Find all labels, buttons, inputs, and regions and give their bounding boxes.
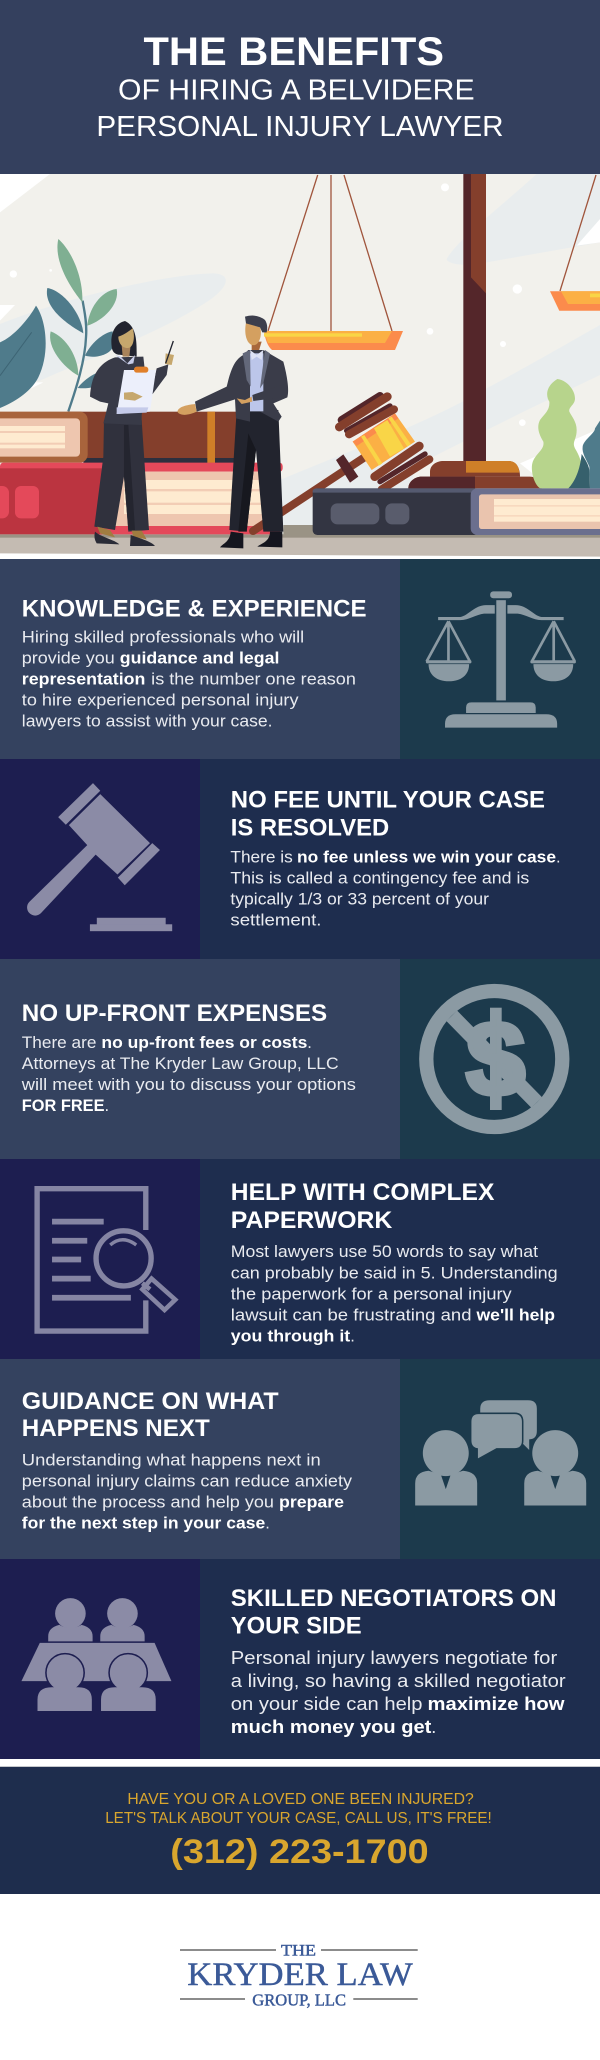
illustration: lawyers with scales and gavel [0, 174, 600, 560]
text block [21, 1034, 356, 1115]
woman with clipboard [90, 321, 174, 546]
text block: to hire experienced personal injury [22, 691, 299, 709]
scale post [463, 174, 486, 462]
logo: the kryder law group [180, 1941, 418, 2010]
heading: HAPPENS NEXT [22, 1415, 210, 1442]
logo: the kryder law group: KRYDER LAW [187, 1957, 414, 1993]
text block: about the process and help you [22, 1494, 274, 1512]
panel: no up-front expenses [0, 959, 600, 1159]
text block: on your side can help [231, 1694, 422, 1714]
text block: representation [22, 670, 145, 688]
text block: There are [22, 1034, 96, 1052]
right books [313, 488, 600, 535]
heading [22, 1388, 279, 1442]
icon: gavel [27, 783, 172, 931]
heading: NO FEE UNTIL YOUR CASE [231, 787, 545, 814]
text block: settlement. [230, 912, 322, 930]
text block [230, 848, 561, 930]
text block: FOR FREE [22, 1097, 104, 1115]
icon: people talking [415, 1400, 586, 1506]
text block: Hiring skilled professionals who will [22, 628, 304, 646]
call to action text [105, 1791, 492, 1827]
heading: GUIDANCE ON WHAT [22, 1388, 279, 1415]
heading: NO UP-FRONT EXPENSES [22, 1000, 327, 1027]
text block: maximize how [428, 1694, 566, 1714]
logo: the kryder law group: GROUP, LLC [252, 1991, 346, 2010]
title: THE BENEFITS [144, 30, 444, 74]
text block: Personal injury lawyers negotiate for [231, 1648, 557, 1668]
heading: KNOWLEDGE & EXPERIENCE [22, 595, 367, 622]
plant [47, 239, 117, 411]
heading [231, 1179, 495, 1234]
gavel [253, 396, 429, 531]
panel: no fee until resolved [0, 759, 600, 959]
text block: typically 1/3 or 33 percent of your [230, 890, 490, 908]
text block: personal injury claims can reduce anxiety [22, 1472, 353, 1490]
phone number: (312) 223-1700 [170, 1833, 429, 1871]
text block: Understanding what happens next in [22, 1451, 321, 1469]
title [96, 30, 504, 143]
big leaf [0, 306, 46, 408]
text block [22, 1451, 353, 1532]
text block: the paperwork for a personal injury [231, 1285, 513, 1303]
logo: the kryder law group: THE [281, 1941, 316, 1960]
heading: SKILLED NEGOTIATORS ON [231, 1585, 557, 1612]
text block: much money you get [231, 1717, 431, 1737]
title: PERSONAL INJURY LAWYER [96, 111, 504, 143]
heading [231, 787, 545, 842]
floor [0, 525, 600, 559]
icon: document with magnifier [37, 1189, 175, 1331]
text block: . [556, 848, 561, 866]
panel: help with paperwork [0, 1159, 600, 1359]
text block: a living, so having a skilled negotiator [231, 1671, 566, 1691]
text block: This is called a contingency fee and is [230, 869, 529, 887]
man in suit [177, 316, 288, 548]
shrubs [532, 379, 600, 488]
text block [231, 1648, 566, 1737]
text block: Most lawyers use 50 words to say what [231, 1243, 538, 1261]
icon: meeting table [21, 1598, 171, 1711]
call to action banner [0, 1766, 600, 1894]
right scale pan [550, 175, 600, 311]
panel: skilled negotiators [0, 1559, 600, 1759]
icon: no money [426, 991, 562, 1127]
text block [231, 1243, 558, 1345]
text block: can probably be said in 5. Understanding [231, 1264, 558, 1282]
heading: YOUR SIDE [231, 1612, 362, 1639]
panel: guidance on what happens next [0, 1359, 600, 1559]
icon: no money: $ [466, 1000, 525, 1118]
text block: we'll help [475, 1306, 555, 1324]
heading: IS RESOLVED [231, 814, 389, 842]
icon: scales of justice [426, 591, 576, 728]
text block: is the number one reason [151, 670, 356, 688]
panel: knowledge and experience [0, 559, 600, 759]
text block: you through it [231, 1327, 351, 1345]
text block: lawyers to assist with your case. [22, 712, 272, 730]
heading: HELP WITH COMPLEX [231, 1179, 495, 1206]
text block: no fee unless we win your case [297, 848, 556, 866]
text block: provide you [22, 649, 115, 667]
call to action text: LET'S TALK ABOUT YOUR CASE, CALL US, IT'S FREE! [105, 1810, 492, 1827]
scale base [408, 461, 542, 488]
text block [22, 628, 356, 730]
text block: Attorneys at The Kryder Law Group, LLC [22, 1055, 339, 1073]
text block: prepare [279, 1494, 344, 1512]
call to action text: HAVE YOU OR A LOVED ONE BEEN INJURED? [127, 1791, 474, 1808]
left scale pan [264, 175, 403, 350]
text block: . [350, 1327, 355, 1345]
text block: will meet with you to discuss your options [21, 1076, 356, 1094]
text block: lawsuit can be frustrating and [231, 1306, 472, 1324]
text block: . [431, 1717, 436, 1737]
text block: . [265, 1514, 270, 1532]
heading [231, 1585, 557, 1639]
text block: for the next step in your case [22, 1514, 265, 1532]
stacked books [0, 412, 283, 534]
title: OF HIRING A BELVIDERE [118, 74, 475, 106]
text block: . [307, 1034, 312, 1052]
text block: no up-front fees or costs [101, 1034, 307, 1052]
heading: PAPERWORK [231, 1207, 393, 1234]
text block: . [104, 1097, 109, 1115]
text block: There is [230, 848, 293, 866]
text block: guidance and legal [120, 649, 279, 667]
header panel [0, 0, 600, 174]
